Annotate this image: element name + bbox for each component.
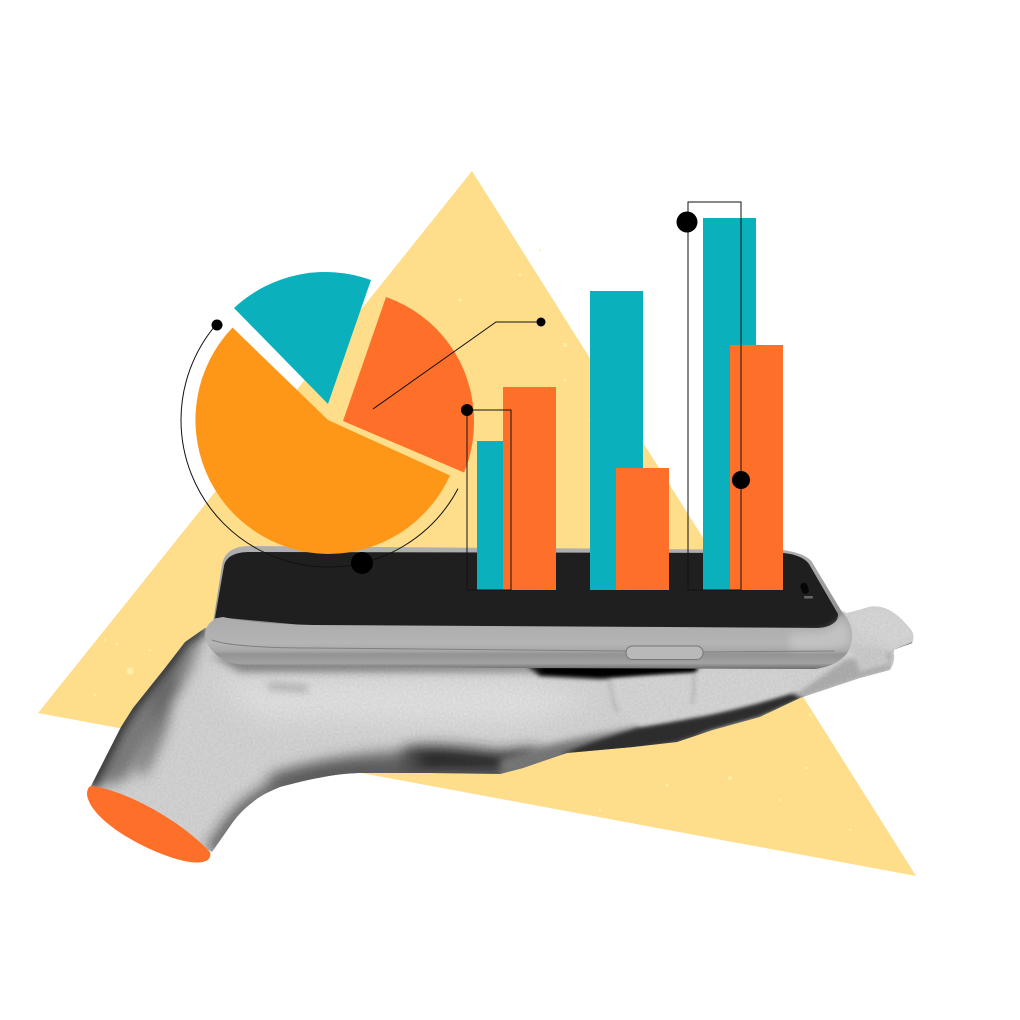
group three orange bar: [730, 345, 783, 590]
group two teal bar: [590, 291, 643, 590]
pie leader line: [373, 322, 541, 409]
teal slice: [234, 272, 371, 404]
wrist ridge: [140, 677, 173, 773]
illustration: [38, 171, 916, 876]
dark palm band: [400, 746, 540, 772]
group two orange bar: [616, 468, 669, 590]
phone screen: [215, 552, 838, 628]
body seam: [212, 640, 835, 652]
far finger: [850, 608, 913, 646]
middle finger: [795, 652, 892, 697]
finger creases: [609, 674, 694, 712]
thin line accents and dots: [181, 202, 750, 590]
hand: [91, 606, 914, 852]
lower palm edge: [212, 772, 520, 852]
yellow triangle background: [38, 171, 916, 876]
palm heel gray: [500, 718, 700, 780]
red-orange slice: [343, 297, 474, 472]
dot on first box: [461, 404, 473, 416]
left edge dark: [91, 628, 205, 786]
corner highlight: [790, 618, 849, 649]
dot on leader line: [536, 318, 546, 326]
outline box over third bars: [688, 202, 741, 590]
skin grain: [109, 606, 910, 840]
speaker: [799, 582, 810, 595]
dot on arc bottom: [351, 552, 373, 574]
side button: [626, 646, 703, 660]
finger gap: [893, 643, 913, 651]
bar chart: [477, 218, 783, 590]
phone back rim: [212, 546, 842, 630]
sensor: [804, 596, 813, 598]
outline box over first bars: [467, 410, 511, 590]
thumb: [610, 672, 793, 726]
dot on arc start: [212, 320, 222, 330]
large orange slice: [195, 328, 450, 554]
group one orange bar: [503, 387, 556, 590]
dot on third box right: [732, 471, 750, 489]
bright palm patches: [237, 683, 564, 722]
palm crease: [268, 686, 308, 689]
group one teal bar: [477, 441, 503, 590]
phone: [205, 546, 852, 669]
dot on third box top: [676, 212, 698, 232]
orbit arc around pie: [181, 324, 458, 567]
dark strip below thumb: [560, 693, 806, 755]
left side gray area: [85, 628, 205, 790]
orange wrist cut: [87, 786, 210, 863]
shadow under phone: [525, 664, 700, 679]
phone body edge: [205, 612, 852, 669]
pie chart: [195, 272, 474, 554]
group three teal bar: [703, 218, 756, 590]
